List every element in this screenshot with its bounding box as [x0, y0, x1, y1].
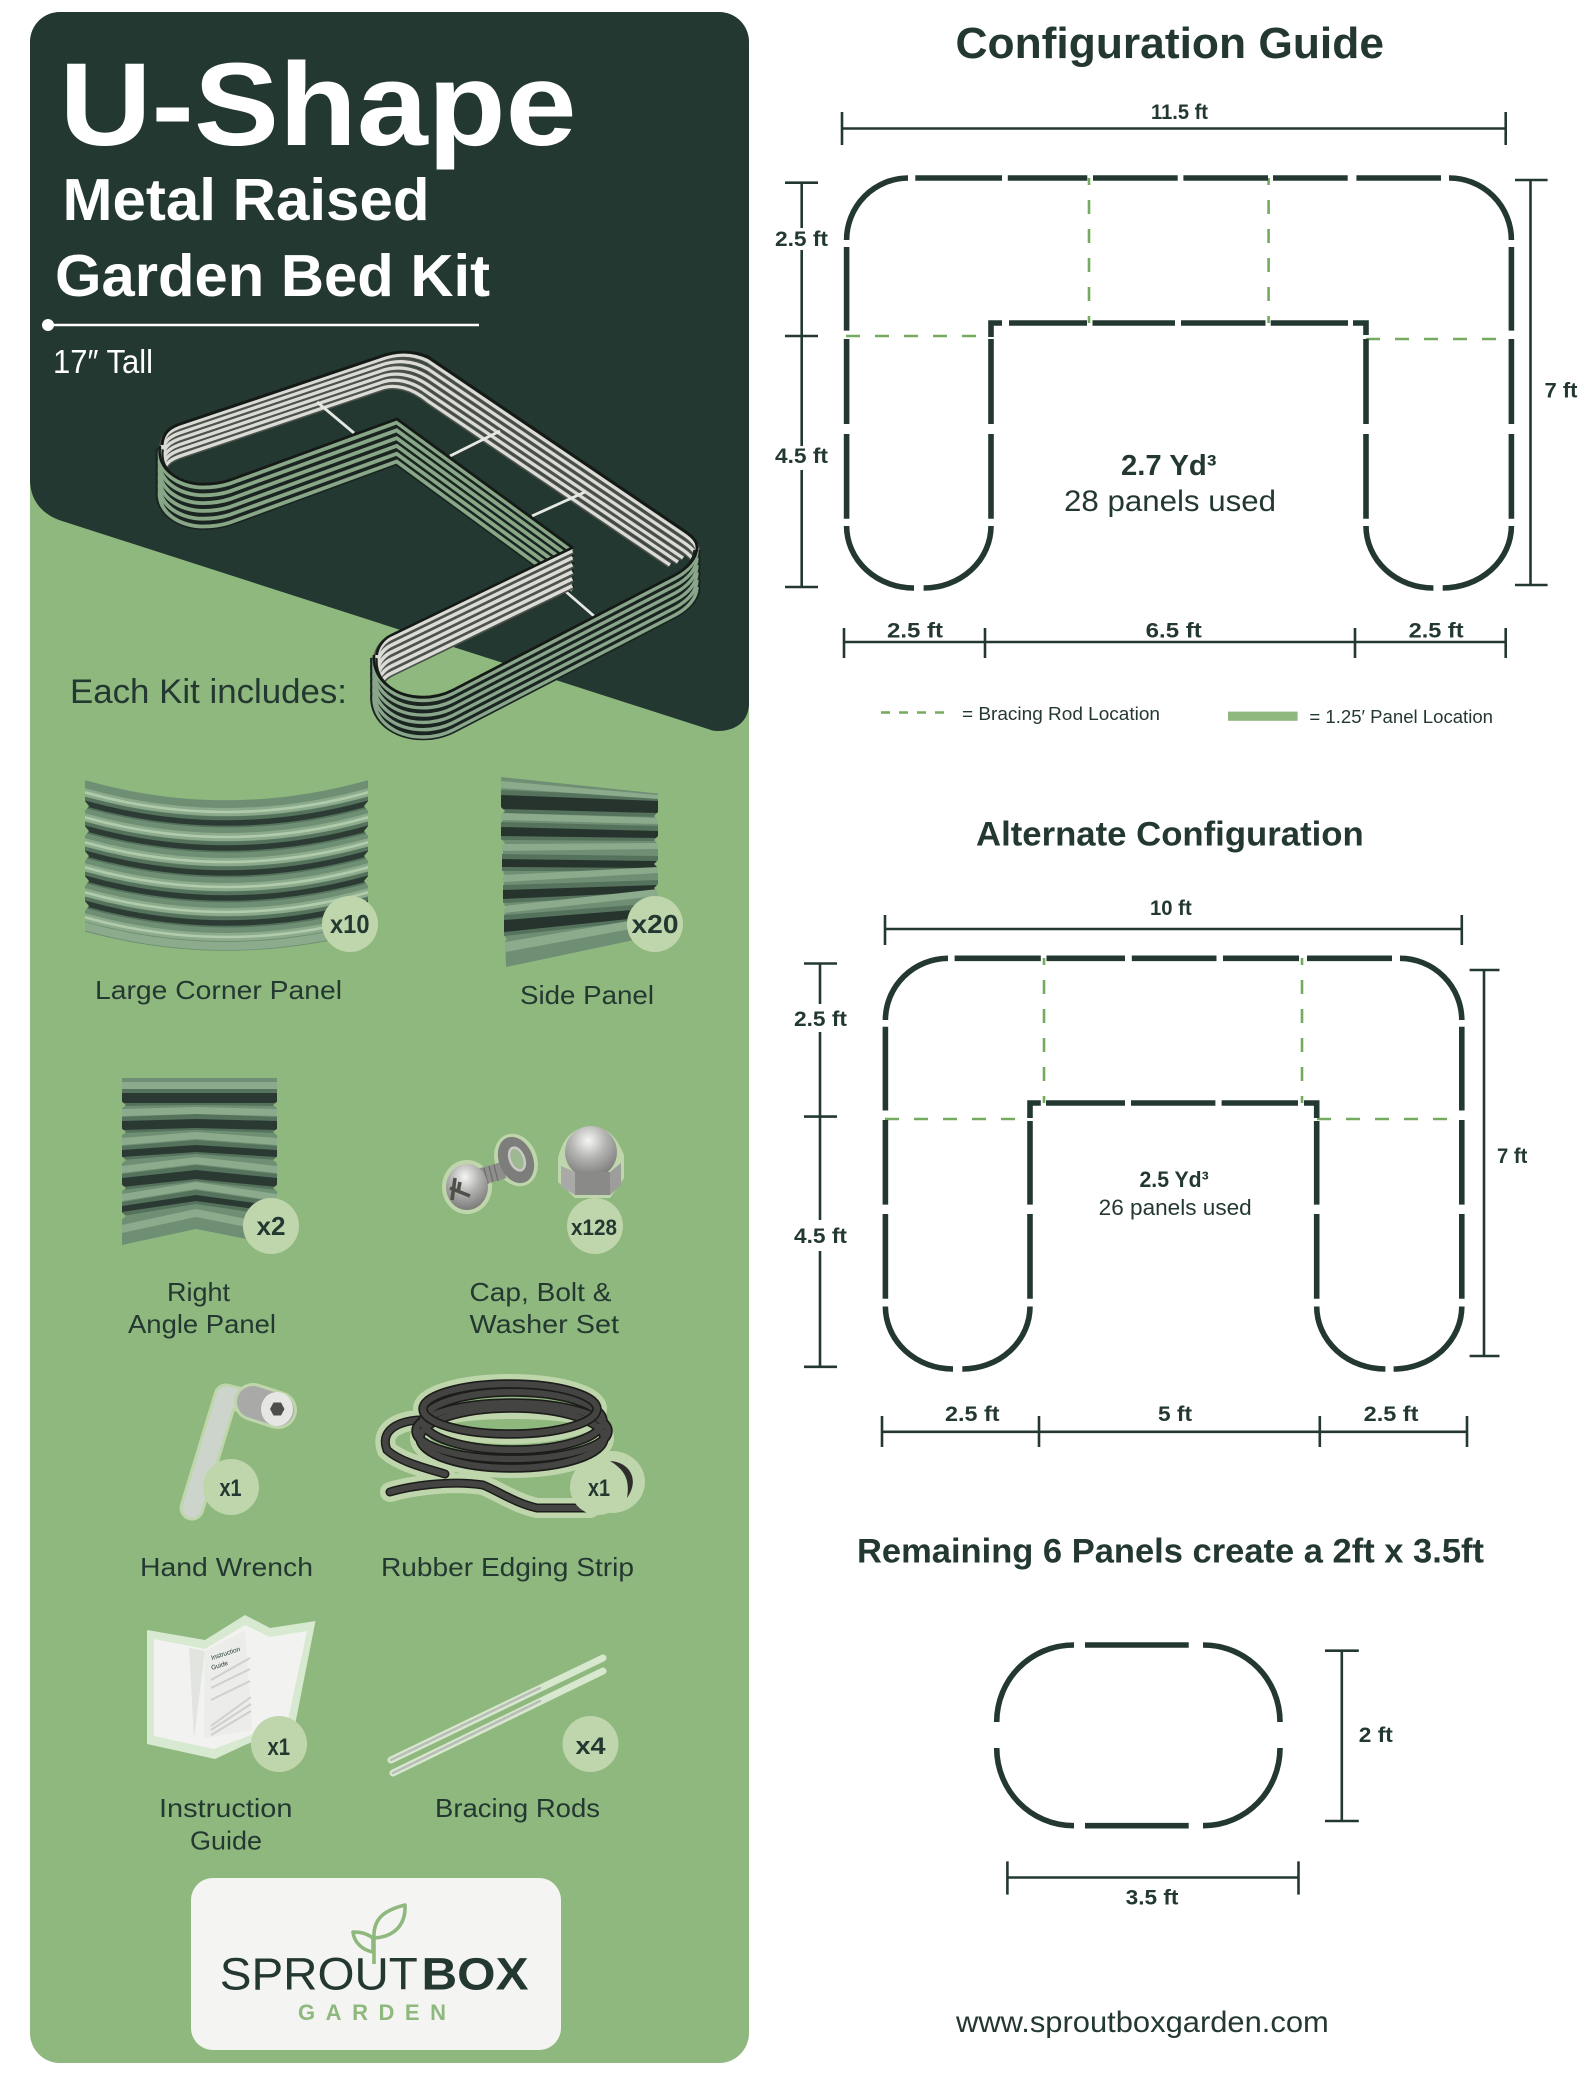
icon: two rods: [391, 1658, 603, 1773]
subtitle: Garden Bed Kit: Garden Bed Kit: [55, 243, 490, 309]
icon: rubber coil: [385, 1384, 645, 1513]
label 6.5 ft: 6.5 ft: [1146, 620, 1202, 642]
wordmark SPROUT: SPROUT: [220, 1948, 418, 2000]
oval bed outline: [997, 1645, 1280, 1826]
icon: corrugated right angle panel: [120, 1078, 279, 1245]
label: Bracing Rods: [435, 1793, 600, 1823]
heading: Configuration Guide: Configuration Guide: [956, 19, 1384, 68]
item: large corner panel: [70, 788, 383, 1005]
label: Rubber Edging Strip: [381, 1552, 634, 1582]
item: cap, bolt and washer set: [442, 1126, 624, 1339]
badge x128: x128: [571, 1215, 617, 1240]
item: rubber edging strip: [381, 1384, 645, 1582]
dimension: right depth 7 ft: [1470, 970, 1500, 1356]
wordmark GARDEN: GARDEN: [298, 2000, 446, 2025]
inner wall outer face: [160, 419, 572, 590]
badge x1: [251, 1716, 307, 1772]
badge x2: [243, 1198, 299, 1254]
dimension: overall width 11.5 ft: [842, 112, 1506, 145]
wordmark BOX: BOX: [422, 1948, 528, 2000]
heading: Each Kit includes: Each Kit includes:: [70, 673, 347, 711]
label 2.5 ft left: 2.5 ft: [945, 1403, 1000, 1426]
dimension: 3.5 ft: [1007, 1861, 1298, 1895]
item: side panel: [499, 777, 683, 1010]
diagram: alternate configuration: [794, 897, 1527, 1447]
U-shape bed outline: [847, 178, 1511, 588]
label line 2: Washer Set: [470, 1309, 620, 1339]
item: bracing rods: [391, 1658, 618, 1823]
label 5 ft: 5 ft: [1158, 1403, 1192, 1426]
bracing rod dashes: [885, 958, 1462, 1119]
legend: panel location: [1228, 707, 1493, 727]
panel: kit contents: [30, 12, 749, 2063]
badge x20: [627, 896, 683, 952]
item: hand wrench: [140, 1392, 313, 1582]
dimension: bottom widths: [844, 628, 1506, 658]
badge x1: x1: [268, 1734, 290, 1761]
side notches: [84, 800, 369, 912]
illustration: U-shaped raised bed: [160, 352, 697, 737]
badge x4: [562, 1716, 618, 1772]
dimension: bottom widths: [882, 1416, 1467, 1447]
item: right angle panel: [120, 1078, 299, 1339]
bracing rods in bed: [317, 402, 594, 616]
title: U-Shape: U-Shape: [60, 39, 576, 171]
item: instruction guide: [147, 1615, 316, 1856]
legend: bracing rod: = Bracing Rod Location: [962, 704, 1160, 724]
panels used: 26 panels used: [1099, 1195, 1252, 1220]
icon: bolt and washer: [442, 1127, 546, 1214]
back wall inner face: [162, 352, 697, 565]
label 2.5 ft right: 2.5 ft: [1364, 1403, 1418, 1426]
label line 2: Guide: [190, 1826, 262, 1856]
heading: Alternate Configuration: Alternate Configuration: [976, 816, 1364, 854]
panels used: 28 panels used: [1064, 485, 1276, 518]
front wall outer face: [374, 547, 697, 737]
badge x128: [567, 1198, 623, 1254]
label: Side Panel: [520, 980, 654, 1010]
dimension: 2 ft: [1325, 1651, 1359, 1821]
label 4.5 ft: 4.5 ft: [775, 445, 828, 468]
label 10 ft: 10 ft: [1150, 897, 1192, 920]
label 3.5 ft: 3.5 ft: [1126, 1887, 1178, 1910]
badge x10: [322, 896, 378, 952]
dimension: left depths: [785, 183, 818, 587]
badge x1: x1: [588, 1475, 610, 1502]
label: Large Corner Panel: [95, 975, 342, 1005]
diagram: main configuration: [775, 101, 1578, 727]
label line 1: Instruction: [159, 1793, 292, 1823]
U-shape bed outline: [885, 958, 1462, 1369]
label: Hand Wrench: [140, 1552, 313, 1582]
legend: panel location: = 1.25′ Panel Location: [1309, 707, 1493, 727]
icon: wrench: [192, 1392, 293, 1508]
diagram: remaining 6 panel oval bed: [997, 1645, 1393, 1910]
dimension: right depth 7 ft: [1515, 180, 1548, 585]
label 4.5 ft: 4.5 ft: [794, 1225, 847, 1248]
bracing rod dashes: [846, 178, 1511, 339]
dimension: overall width 10 ft: [885, 915, 1462, 945]
label 2 ft: 2 ft: [1359, 1724, 1393, 1747]
website url: www.sproutboxgarden.com: [955, 2006, 1329, 2039]
volume: 2.5 Yd³: [1140, 1167, 1209, 1192]
label line 1: Cap, Bolt &: [470, 1277, 612, 1307]
dimension: left depths: [804, 964, 837, 1367]
logo card: [191, 1878, 561, 2050]
label line 2: Angle Panel: [128, 1309, 276, 1339]
icon: folded instruction sheet: [147, 1615, 316, 1759]
badge x20: x20: [632, 909, 678, 939]
panel background green: [30, 12, 749, 2063]
header dark shape: [30, 12, 749, 731]
badge x1: x1: [220, 1475, 242, 1502]
tiny sheet title second line: Guide: [210, 1660, 229, 1672]
title rule with dot: [42, 319, 479, 331]
heading: remaining panels: Remaining 6 Panels create a 2ft x 3.5ft: [857, 1532, 1484, 1570]
icon: corrugated curved panel: [70, 788, 383, 946]
badge x1: [203, 1459, 259, 1515]
label 2.5 ft right: 2.5 ft: [1409, 620, 1464, 642]
label line 1: Right: [167, 1277, 231, 1307]
volume: 2.7 Yd³: [1121, 450, 1217, 482]
label 2.5 ft left: 2.5 ft: [887, 620, 943, 642]
badge x10: x10: [330, 909, 370, 939]
badge x4: x4: [576, 1733, 606, 1760]
icon: sprout: [353, 1905, 405, 1964]
label 2.5 ft: 2.5 ft: [775, 228, 828, 251]
badge x1: [570, 1459, 626, 1515]
label 7 ft: 7 ft: [1497, 1145, 1527, 1168]
subtitle: Metal Raised: Metal Raised: [62, 167, 430, 233]
label 2.5 ft: 2.5 ft: [794, 1008, 847, 1031]
icon: cap nut: [558, 1126, 624, 1198]
label 11.5 ft: 11.5 ft: [1151, 101, 1208, 124]
label 7 ft: 7 ft: [1544, 380, 1578, 402]
tiny sheet title: Instruction: [210, 1646, 242, 1662]
icon: corrugated side panel: [499, 777, 660, 967]
front wall inner face: [377, 548, 572, 693]
height label: 17″ Tall: [53, 343, 153, 380]
badge x2: x2: [256, 1211, 286, 1241]
